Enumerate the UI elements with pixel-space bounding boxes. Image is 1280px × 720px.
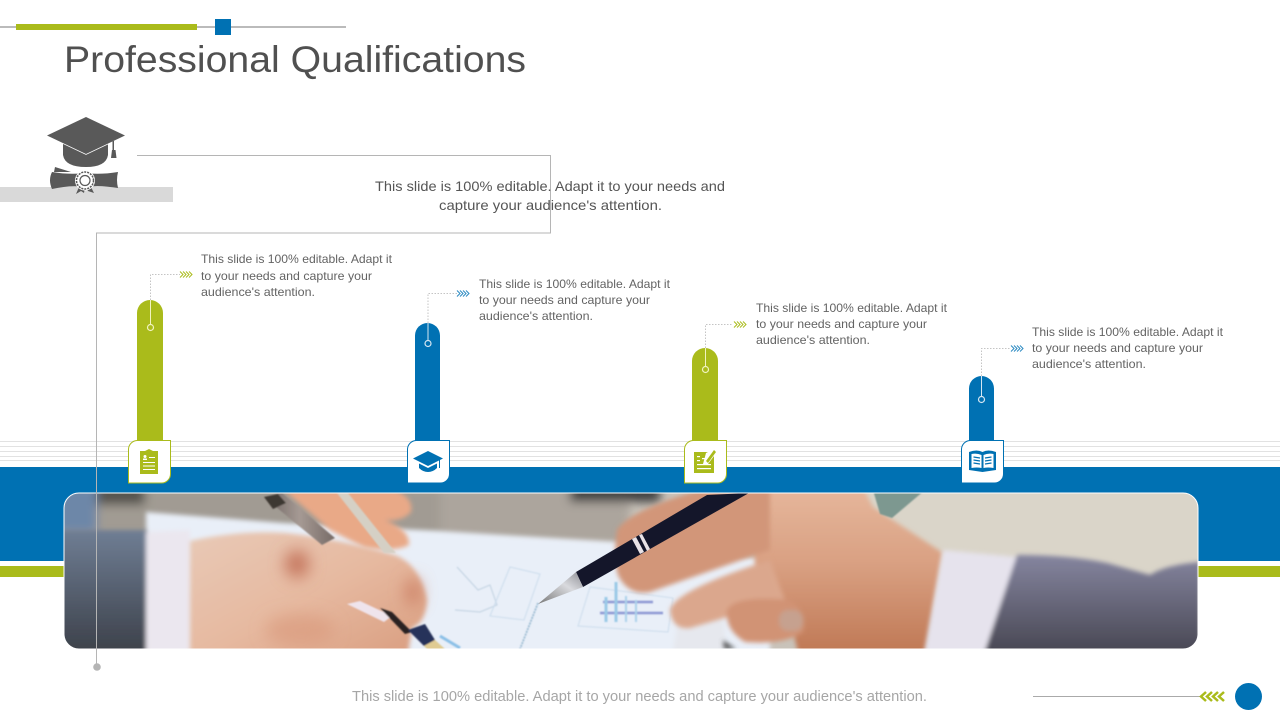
milestone 2 (408, 277, 671, 483)
photo border (64, 493, 1198, 649)
small object on table (873, 494, 922, 519)
blue band (0, 467, 1280, 561)
text 2: audience's attention. (479, 309, 593, 323)
text 3: to your needs and capture your (756, 317, 927, 331)
icon: graduation cap and diploma (47, 117, 125, 194)
title: Professional Qualifications (64, 39, 526, 80)
milestone 3 (684, 301, 948, 483)
icon: note and pen (694, 449, 717, 473)
milestone 1 (128, 252, 393, 483)
text 1: audience's attention. (201, 285, 315, 299)
icon: clipboard (140, 449, 158, 474)
callout leader 3 (706, 324, 733, 366)
text 1: to your needs and capture your (201, 269, 372, 283)
main description: This slide is 100% editable. Adapt it to your needs and (375, 178, 725, 194)
left sleeve and cuff (64, 528, 186, 648)
decorative stripes (0, 442, 1280, 460)
text 4: to your needs and capture your (1032, 341, 1203, 355)
marker 3 (702, 366, 708, 372)
icon: graduation cap (413, 451, 443, 472)
footer text: This slide is 100% editable. Adapt it to your needs and capture your audience's attention. (352, 689, 927, 705)
white object under right hand (676, 622, 724, 648)
right hand palm (752, 494, 944, 648)
text 3: audience's attention. (756, 333, 870, 347)
pens in left hand (264, 493, 445, 652)
chart details on paper (440, 567, 673, 649)
callout leader 1 (150, 274, 180, 324)
card 3 (684, 440, 726, 483)
left hand shading (265, 550, 420, 646)
callout leader 2 (428, 294, 457, 340)
photo: hands with pens over charts (64, 494, 1198, 648)
milestone 4 (962, 325, 1224, 483)
upper fingers of left hand (284, 490, 411, 549)
card 1 (128, 440, 170, 483)
pillar 4 (969, 376, 994, 442)
connector line (93, 156, 550, 671)
grey shelf bar (0, 187, 173, 202)
card 4 (962, 440, 1004, 483)
text 3 (756, 301, 948, 347)
right pen (538, 493, 749, 604)
text 2: This slide is 100% editable. Adapt it (479, 277, 671, 291)
paper (146, 512, 770, 660)
chevrons 3 (734, 322, 746, 328)
text 4 (1032, 325, 1224, 371)
text 4: This slide is 100% editable. Adapt it (1032, 325, 1224, 339)
chevrons 2 (457, 290, 469, 296)
main description (375, 178, 725, 213)
top accent bar (0, 19, 346, 35)
marker 2 (425, 340, 431, 346)
left hand (190, 532, 427, 660)
text 3: This slide is 100% editable. Adapt it (756, 301, 948, 315)
text 2: to your needs and capture your (479, 293, 650, 307)
text 1: This slide is 100% editable. Adapt it (201, 252, 393, 266)
icon: open book (969, 450, 996, 472)
text 4: audience's attention. (1032, 357, 1146, 371)
marker 1 (148, 324, 154, 330)
text 1 (201, 252, 393, 299)
right hand fingers (615, 490, 804, 649)
right cuff and sleeve (923, 550, 1200, 660)
main description: capture your audience's attention. (439, 197, 662, 213)
green band (0, 566, 1280, 577)
chevrons 4 (1011, 346, 1023, 352)
callout leader 4 (982, 348, 1010, 396)
pillar 1 (137, 300, 163, 442)
pillar 2 (415, 323, 440, 442)
card 2 (408, 440, 450, 483)
text 2 (479, 277, 671, 323)
footer pointer (1033, 683, 1262, 710)
chevrons 1 (180, 272, 192, 278)
marker 4 (978, 396, 984, 402)
pillar 3 (692, 348, 718, 442)
